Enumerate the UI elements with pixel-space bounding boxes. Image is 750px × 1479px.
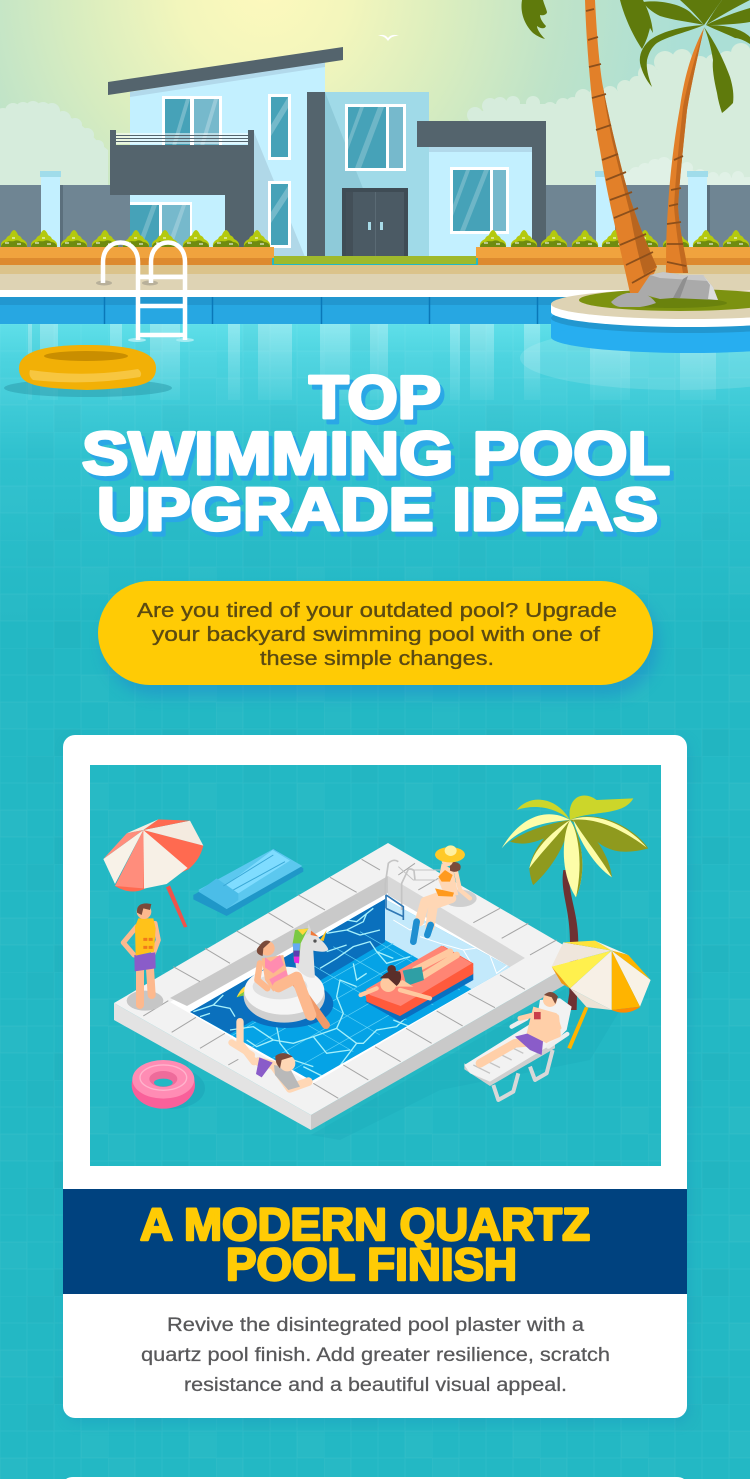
balcony bbox=[110, 130, 254, 195]
house bbox=[108, 47, 546, 257]
body text bbox=[141, 1315, 610, 1396]
umbrella left bbox=[103, 819, 203, 928]
man in life vest bbox=[123, 903, 163, 1011]
umbrella right bbox=[552, 941, 651, 1049]
pink ring bbox=[132, 1060, 205, 1109]
palm fronds bbox=[521, 0, 750, 113]
palm trunks bbox=[585, 0, 704, 293]
pool deck ground bbox=[0, 265, 750, 290]
palm tree bbox=[502, 795, 648, 1010]
body text: quartz pool finish. Add greater resilience, scratch bbox=[141, 1345, 610, 1366]
pool water bbox=[190, 899, 510, 1081]
deck tile joints bbox=[143, 859, 380, 1098]
hero scene: modern house and pool bbox=[0, 0, 750, 410]
pool edge and wall bbox=[0, 290, 750, 324]
bird bbox=[378, 35, 399, 41]
title bbox=[82, 364, 670, 543]
panel: quartz pool finish card bbox=[63, 735, 687, 1418]
window lower left bbox=[130, 202, 192, 249]
island bbox=[520, 289, 750, 390]
sky bbox=[0, 0, 750, 190]
title: UPGRADE IDEAS bbox=[97, 476, 658, 543]
clouds bbox=[0, 43, 750, 190]
woman lying on deck bbox=[232, 1022, 308, 1090]
pool deck bbox=[114, 843, 584, 1130]
title: SWIMMING POOL bbox=[82, 420, 670, 487]
body text: Revive the disintegrated pool plaster with a bbox=[167, 1315, 584, 1336]
window right bbox=[450, 167, 509, 234]
man on lounger bbox=[464, 992, 572, 1100]
right group: palm and people bbox=[385, 795, 651, 1100]
balcony shadow on wall bbox=[254, 132, 305, 257]
heading text bbox=[140, 1199, 590, 1290]
next card top edge bbox=[63, 1477, 687, 1479]
deck shadow bbox=[311, 978, 620, 1140]
window narrow lower bbox=[268, 181, 291, 248]
woman with sun hat bbox=[413, 845, 477, 942]
intro text: your backyard swimming pool with one of bbox=[152, 624, 601, 646]
window upper left bbox=[162, 96, 222, 146]
yellow pool float bbox=[4, 345, 172, 397]
unicorn float with woman bbox=[237, 924, 333, 1028]
red air mattress with woman bbox=[361, 946, 473, 1022]
water reflections bbox=[28, 324, 716, 400]
fence wall bbox=[0, 185, 750, 250]
roof bbox=[108, 47, 343, 95]
title: TOP bbox=[309, 364, 441, 431]
pool ladder small bbox=[385, 860, 440, 920]
pool ladder bbox=[96, 242, 194, 342]
page background: pool water bbox=[0, 324, 750, 1479]
heading text: POOL FINISH bbox=[226, 1239, 517, 1290]
planter boxes and lawn bbox=[0, 247, 750, 265]
intro text bbox=[137, 600, 617, 670]
hedges bbox=[1, 230, 749, 247]
lower wall under balcony bbox=[130, 195, 225, 249]
body text: resistance and a beautiful visual appeal. bbox=[184, 1375, 567, 1396]
heading text: A MODERN QUARTZ bbox=[140, 1199, 590, 1250]
door bbox=[342, 188, 408, 257]
rocks bbox=[611, 272, 727, 308]
left group: beach items bbox=[103, 819, 303, 1109]
fence pillars bbox=[40, 171, 710, 249]
window narrow upper bbox=[268, 94, 291, 160]
caustic lines bbox=[193, 908, 510, 1077]
heading band bbox=[63, 1189, 687, 1294]
window centre bbox=[345, 104, 406, 171]
middle group: people in the pool bbox=[232, 924, 473, 1090]
intro pill bbox=[98, 581, 653, 685]
intro text: Are you tired of your outdated pool? Upgrade bbox=[137, 600, 617, 622]
illustration: isometric pool party bbox=[90, 765, 661, 1166]
intro text: these simple changes. bbox=[260, 648, 494, 670]
blue air mattress bbox=[193, 849, 303, 916]
